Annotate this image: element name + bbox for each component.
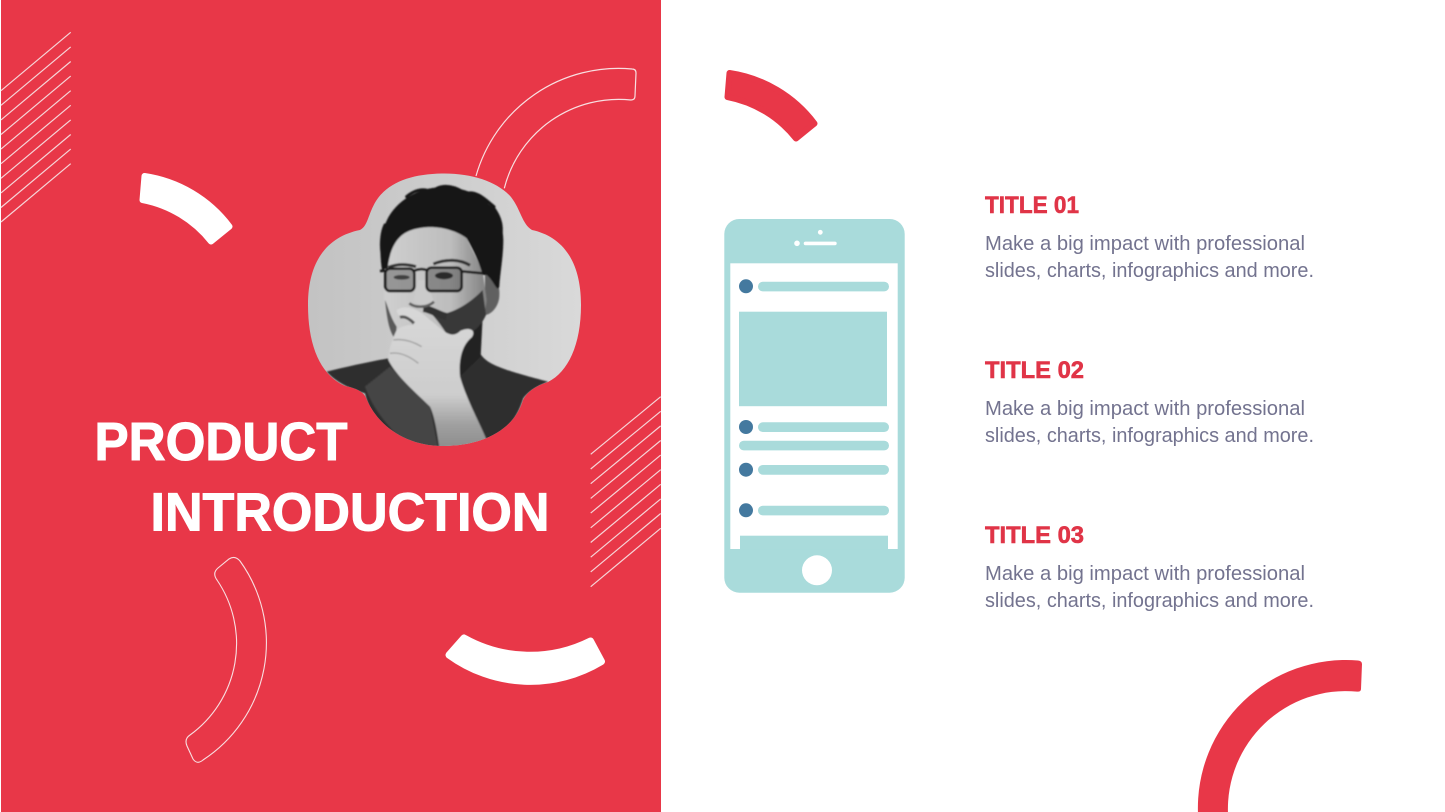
decoration: right hatch lines	[591, 397, 661, 587]
photo: man with glasses in blob shape	[308, 174, 581, 446]
arc: solid red top right of panel	[728, 73, 814, 138]
text block: title 01: Make a big impact with professional	[985, 233, 1305, 255]
text block: title 02: Make a big impact with professional	[985, 398, 1305, 420]
text block: title 01: slides, charts, infographics and more.	[985, 260, 1314, 282]
text block: title 02: slides, charts, infographics and more.	[985, 425, 1314, 447]
text block: title 02: TITLE 02	[985, 357, 1084, 384]
panel: red left background	[1, 0, 661, 812]
decoration: top-left hatch lines	[1, 32, 71, 222]
text block: title 02	[985, 357, 1314, 447]
title: product introduction	[94, 412, 550, 542]
text block: title 03: Make a big impact with professional	[985, 563, 1305, 585]
arc: solid white upper left	[142, 176, 230, 242]
text block: title 03	[985, 522, 1314, 612]
arc: solid red bottom right	[1198, 660, 1362, 812]
text block: title 01: TITLE 01	[985, 192, 1079, 219]
arc: solid white bottom	[449, 638, 602, 681]
arc: white outlined lower left	[186, 557, 266, 762]
text block: title 03: slides, charts, infographics and more.	[985, 590, 1314, 612]
title: product introduction: INTRODUCTION	[150, 482, 550, 542]
text block: title 01	[985, 192, 1314, 282]
title: product introduction: PRODUCT	[94, 412, 348, 472]
text block: title 03: TITLE 03	[985, 522, 1084, 549]
arc: white outlined top	[476, 68, 636, 188]
icon: smartphone	[724, 219, 905, 593]
